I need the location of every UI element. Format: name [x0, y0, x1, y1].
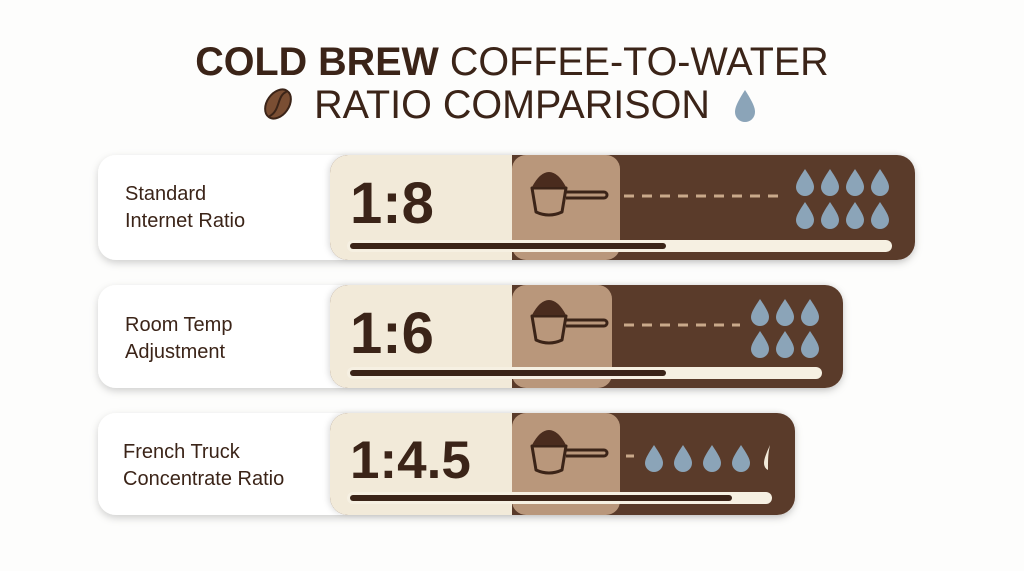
- row 3: French Truck Concentrate Ratio: Concentrate Ratio: [123, 468, 284, 490]
- row 1: Standard Internet Ratio: 1:8: [350, 171, 434, 236]
- icon: coffee bean: [260, 85, 296, 123]
- row 2: Room Temp Adjustment: [98, 285, 843, 388]
- title: RATIO COMPARISON: [314, 83, 710, 127]
- icon: water drop: [735, 90, 755, 122]
- row 1: Standard Internet Ratio: Standard: [125, 183, 206, 205]
- row 3: French Truck Concentrate Ratio: 1:4.5: [350, 431, 471, 490]
- row 3: French Truck Concentrate Ratio: [98, 413, 795, 515]
- row 1: Standard Internet Ratio: Internet Ratio: [125, 210, 245, 232]
- title: COLD BREW COFFEE-TO-WATER: [195, 40, 829, 84]
- title: [195, 40, 829, 127]
- row 3: French Truck Concentrate Ratio: French Truck: [123, 441, 241, 463]
- row 1: Standard Internet Ratio: [98, 155, 915, 260]
- row 2: Room Temp Adjustment: 1:6: [350, 301, 434, 366]
- row 2: Room Temp Adjustment: Adjustment: [125, 341, 225, 363]
- row 2: Room Temp Adjustment: Room Temp: [125, 314, 232, 336]
